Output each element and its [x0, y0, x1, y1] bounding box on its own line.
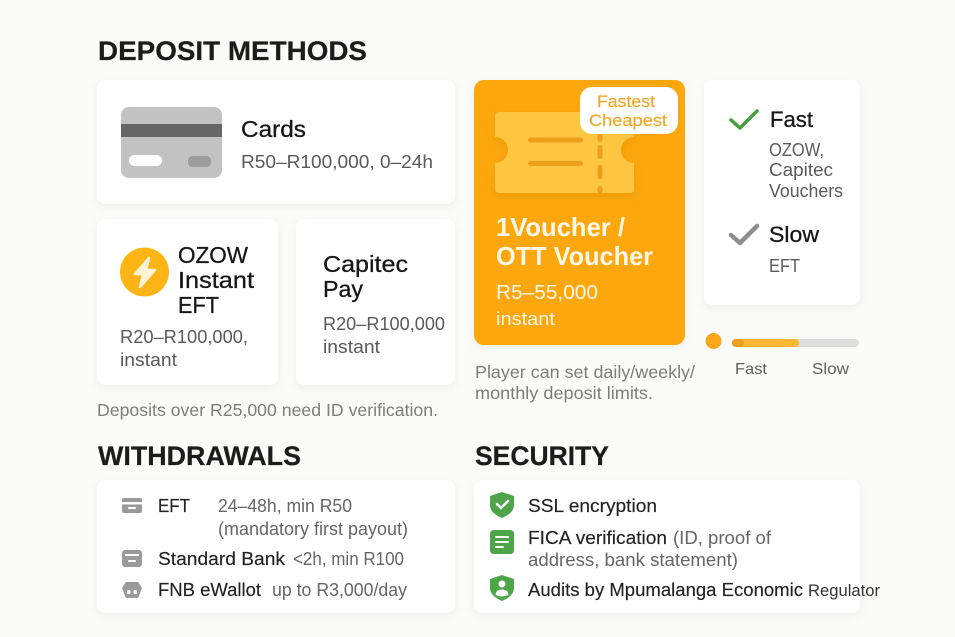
- voucher title: 1Voucher /: [496, 212, 625, 242]
- OZOW detail: instant: [120, 350, 177, 370]
- note: deposit limits: Player can set daily/weekly/: [475, 362, 695, 382]
- heading: security: SECURITY: [475, 441, 609, 471]
- fast methods: OZOW,: [769, 140, 824, 160]
- marker dot: [706, 333, 722, 349]
- row: FICA verification: (ID, proof of: [673, 528, 772, 548]
- note: ID verification: Deposits over R25,000 need ID verification.: [97, 400, 438, 420]
- voucher detail: instant: [496, 309, 555, 329]
- heading: withdrawals: WITHDRAWALS: [98, 441, 301, 471]
- scale label fast: Fast: [735, 361, 768, 378]
- speed scale: [706, 333, 859, 378]
- scale label slow: Slow: [812, 361, 849, 378]
- OZOW title: [178, 242, 255, 318]
- OZOW detail: R20–R100,000,: [120, 327, 248, 347]
- OZOW title: OZOW: [178, 242, 248, 268]
- icon: credit card: [121, 107, 222, 178]
- row: audits: Regulator: [808, 581, 880, 600]
- Capitec title: [323, 251, 408, 302]
- voucher detail: [496, 282, 598, 329]
- scale track: [732, 339, 859, 347]
- row: audits: [490, 575, 880, 601]
- row: SSL encryption: SSL encryption: [528, 496, 657, 516]
- slow title: Slow: [769, 222, 819, 247]
- row: FICA verification: FICA verification: [528, 528, 667, 548]
- Capitec title: Capitec: [323, 251, 408, 277]
- fast methods: [769, 140, 843, 201]
- card title: Cards: [241, 116, 306, 142]
- icon: green check: [731, 111, 757, 128]
- icon: grey check: [731, 226, 757, 243]
- Capitec title: Pay: [323, 276, 363, 302]
- panel: 1Voucher / OTT Voucher: [474, 80, 685, 345]
- row: EFT: 24–48h, min R50: [218, 496, 352, 516]
- row: SSL encryption: [490, 492, 657, 518]
- note: deposit limits: [475, 362, 695, 403]
- row: FNB eWallet: up to R3,000/day: [272, 580, 407, 600]
- panel: cards: [97, 80, 455, 204]
- row: Standard Bank: [122, 549, 404, 569]
- row: FNB eWallet: [122, 580, 407, 600]
- panel: withdrawals: [97, 480, 455, 613]
- badge: fastest cheapest: Cheapest: [589, 111, 667, 130]
- voucher detail: R5–55,000: [496, 282, 598, 304]
- slow methods: EFT: [769, 256, 800, 276]
- voucher title: OTT Voucher: [496, 241, 653, 271]
- row: EFT: EFT: [158, 496, 190, 516]
- row: audits: Audits by Mpumalanga Economic: [528, 580, 803, 600]
- row: EFT: [122, 496, 408, 539]
- icon: voucher ticket: [495, 112, 634, 193]
- OZOW detail: [120, 327, 248, 370]
- Capitec detail: instant: [323, 337, 380, 357]
- fast methods: Capitec: [769, 160, 833, 180]
- note: deposit limits: monthly deposit limits.: [475, 383, 653, 403]
- panel: speed legend: [704, 80, 860, 305]
- row: FNB eWallet: FNB eWallot: [158, 580, 261, 600]
- badge: fastest cheapest: [580, 87, 678, 134]
- row: FICA verification: [490, 528, 772, 570]
- panel: OZOW Instant EFT: [97, 219, 278, 385]
- voucher title: [496, 212, 653, 271]
- card detail: R50–R100,000, 0–24h: [241, 152, 433, 172]
- heading: deposit methods: DEPOSIT METHODS: [98, 36, 367, 66]
- row: EFT: (mandatory first payout): [218, 519, 408, 539]
- Capitec detail: [323, 314, 445, 357]
- panel: Capitec Pay: [296, 219, 455, 385]
- icon: lightning bolt: [120, 248, 169, 296]
- OZOW title: Instant: [178, 267, 255, 293]
- badge: fastest cheapest: Fastest: [597, 92, 655, 111]
- row: FICA verification: address, bank statement): [528, 550, 738, 570]
- fast title: Fast: [770, 107, 813, 132]
- panel: security: [474, 480, 880, 613]
- Capitec detail: R20–R100,000: [323, 314, 445, 334]
- fast methods: Vouchers: [769, 181, 843, 201]
- row: Standard Bank: Standard Bank: [158, 549, 286, 569]
- row: Standard Bank: <2h, min R100: [293, 549, 404, 569]
- OZOW title: EFT: [178, 292, 219, 318]
